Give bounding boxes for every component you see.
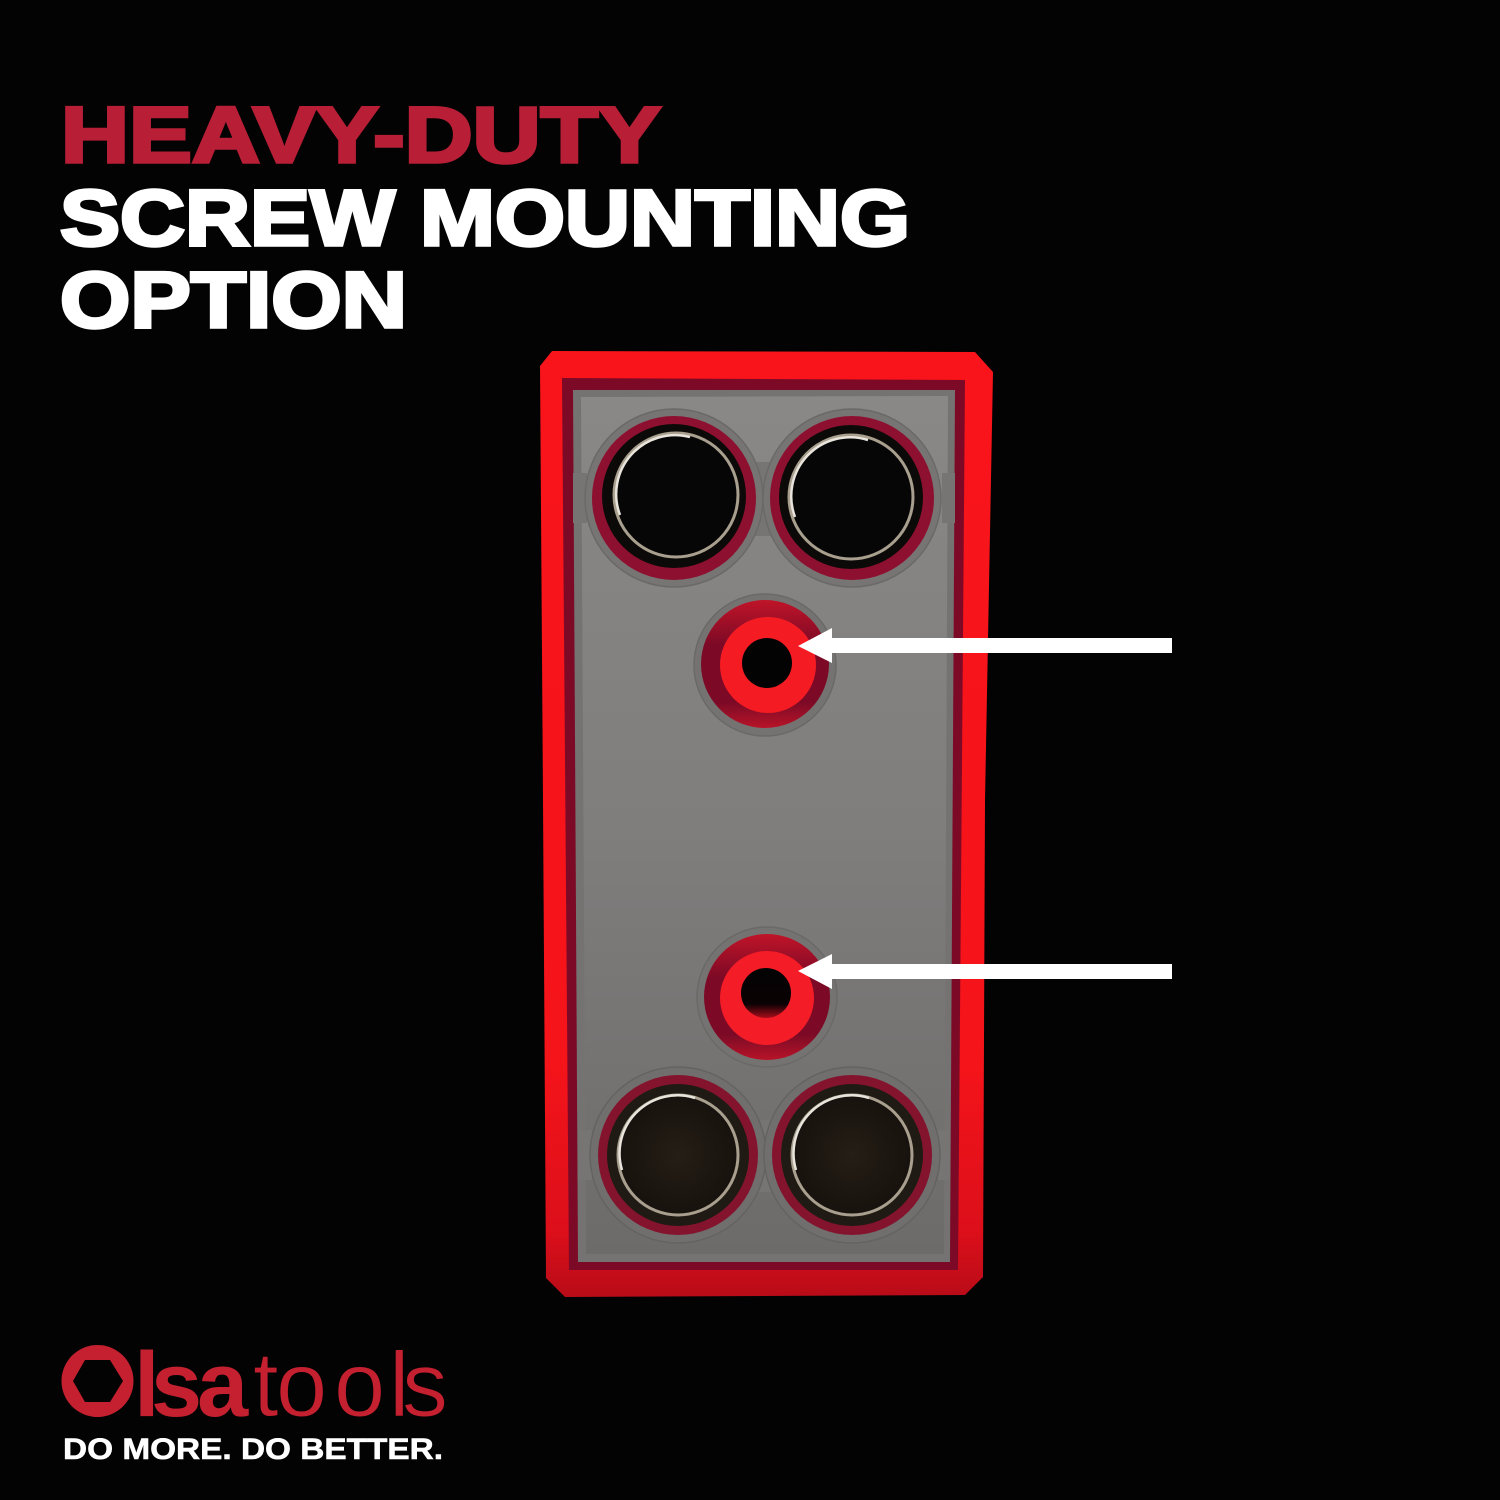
logo wordmark: tools: tools (253, 1334, 448, 1436)
screw hole: bottom (697, 927, 837, 1067)
grey plate (573, 390, 955, 1262)
tagline: DO MORE. DO BETTER. (63, 1433, 443, 1466)
arrow: bottom screw hole (798, 954, 1172, 989)
product: magnetic holder back (540, 351, 993, 1297)
screw hole: top (694, 594, 836, 736)
arrow: top screw hole (798, 628, 1172, 663)
magnet: top right (763, 409, 941, 587)
heading line: screw mounting: SCREW MOUNTING (60, 173, 910, 262)
magnet: top left (585, 409, 763, 587)
logo wordmark: lsa: lsa (134, 1334, 249, 1436)
outer red rim (540, 351, 993, 1297)
logo icon: hexagon O (62, 1345, 134, 1417)
magnet: bottom right (764, 1067, 940, 1243)
inner dark red recess (562, 378, 965, 1270)
title (60, 90, 910, 344)
heading line: option: OPTION (60, 255, 407, 344)
raised plate surface (581, 396, 948, 1254)
logo (62, 1334, 448, 1466)
magnet: bottom left (590, 1067, 766, 1243)
plate channels joining the magnets (573, 462, 955, 1192)
heading line: heavy-duty: HEAVY-DUTY (61, 90, 661, 179)
